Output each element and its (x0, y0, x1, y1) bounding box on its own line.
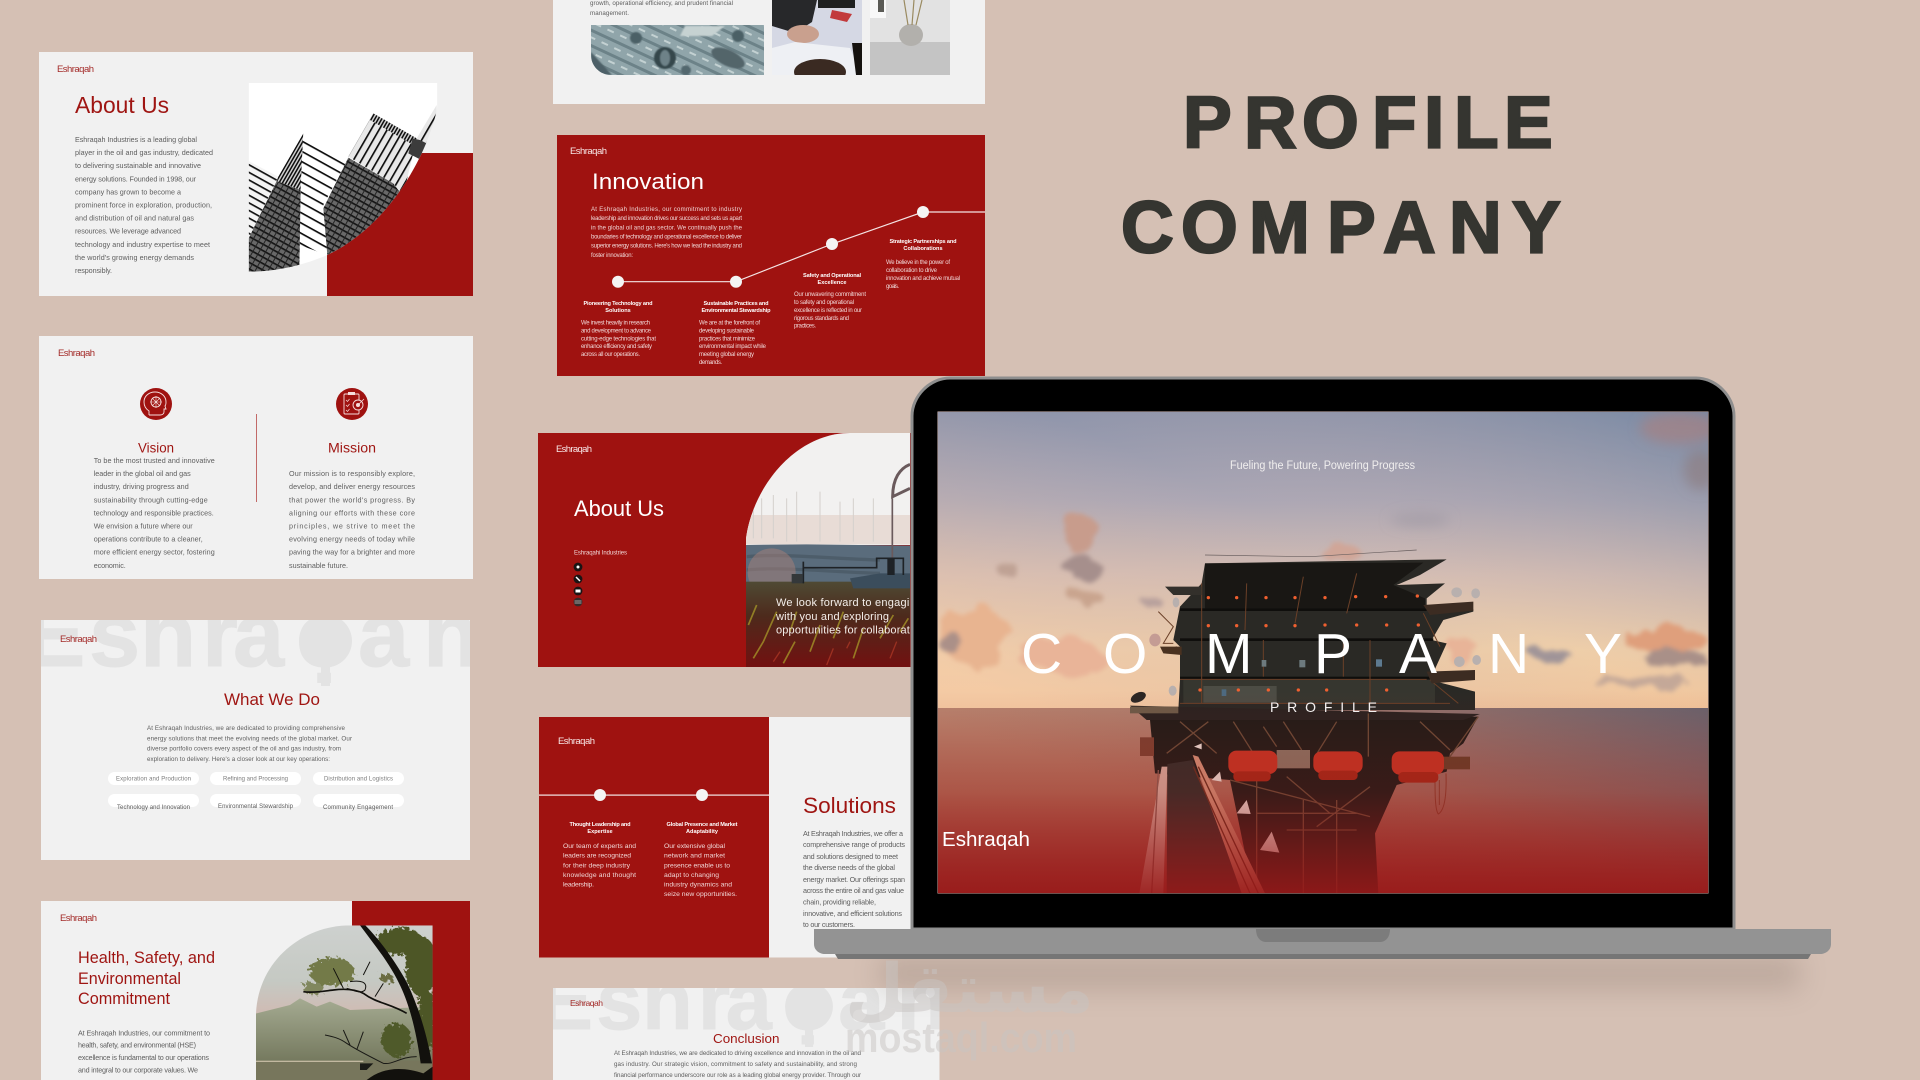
tagline: Fueling the Future, Powering Progress (1230, 460, 1415, 472)
watermark wordmark (41, 620, 470, 686)
milestone: Pioneering Technology: and development to advance (581, 328, 652, 334)
body text: technology and industry expertise to meet (75, 240, 210, 249)
Vision text: more efficient energy sector, fostering (94, 548, 215, 557)
watermark wordmark (553, 988, 940, 1047)
heading: Conclusion (713, 1032, 780, 1046)
body text: energy solutions. Founded in 1998, our (75, 174, 197, 184)
oil rig (1129, 550, 1481, 893)
cover title: COMPANY (1021, 622, 1622, 686)
laptop base (814, 929, 1831, 959)
milestone: Pioneering Technology: Pioneering Technology and (584, 301, 653, 307)
photo: plant by window (870, 0, 950, 75)
milestone: Strategic Partnerships: goals. (886, 284, 899, 290)
Mission text: paving the way for a brighter and more (289, 548, 415, 557)
timeline (539, 789, 769, 801)
body text: to our customers. (803, 920, 855, 929)
body text: prominent force in exploration, production, (75, 200, 212, 210)
body text (78, 1028, 210, 1074)
closing message: We look forward to engaging (776, 597, 922, 609)
item: Thought Leadership: leaders are recognized (563, 853, 631, 860)
body text: chain, providing reliable, (803, 898, 876, 906)
building photo (249, 83, 437, 273)
text: management. (590, 10, 629, 17)
item: Global Presence: network and market (664, 853, 725, 860)
red corner block (327, 153, 473, 296)
item: Global Presence: adapt to changing (664, 872, 719, 879)
intro text: in the global oil and gas sector. We continually push the (591, 226, 743, 232)
pills: key operations: Refining and Processing (223, 776, 288, 782)
red fade overlay (938, 723, 1708, 894)
Vision text: industry, driving progress and (94, 482, 189, 491)
Mission text: principles, we strive to meet the (289, 522, 415, 530)
item: Thought Leadership: knowledge and thought (563, 872, 636, 879)
intro text: leadership and innovation drives our success and sets us apart (591, 216, 742, 222)
panel: financial slide (top, cropped) (553, 0, 985, 104)
body text (803, 829, 905, 929)
closing message: with you and exploring (775, 611, 889, 623)
panel: Health, Safety and Environmental slide (41, 901, 470, 1080)
milestone: Pioneering Technology: enhance efficiency and safety (581, 344, 652, 350)
cover logo: Eshraqah (942, 829, 1030, 851)
intro text: exploration to delivery. Here's a closer look at our key operations: (147, 756, 330, 763)
body text: health, safety, and environmental (HSE) (78, 1040, 196, 1050)
main title: PROFILE COMPANY: COMPANY (1121, 188, 1561, 268)
main deck (1130, 706, 1480, 720)
Vision text: operations contribute to a cleaner, (94, 535, 203, 544)
pills: key operations: Environmental Stewardship (218, 804, 294, 810)
logo: Eshraqah (556, 444, 592, 455)
item: Global Presence: industry dynamics and (664, 882, 732, 888)
laptop shadow (880, 956, 1800, 990)
milestone: Sustainable Practices: Environmental Stewardship (702, 308, 771, 314)
closing message: opportunities for collaboration (776, 624, 925, 636)
heading: Environmental (78, 970, 181, 988)
heading: Health, Safety, and (78, 949, 215, 967)
red block (352, 901, 470, 1080)
body text: Eshraqah Industries is a leading global (75, 135, 197, 144)
heading: What We Do (224, 690, 320, 709)
intro text: At Eshraqah Industries, our commitment to industry (591, 207, 742, 213)
timeline (612, 206, 985, 288)
milestone: Safety and Operational: excellence is reflected in our (794, 308, 862, 314)
body text: to delivering sustainable and innovative (75, 161, 201, 170)
item: Thought Leadership: leadership. (563, 882, 594, 888)
milestone: Strategic Partnerships: innovation and achieve mutual (886, 276, 960, 282)
Mission text: aligning our efforts with these core (289, 508, 415, 517)
item: Global Presence: seize new opportunities. (664, 891, 737, 898)
photo: dollar bills (591, 25, 764, 75)
body text: comprehensive range of products (803, 840, 905, 849)
panel: What We Do slide (41, 620, 470, 860)
dishes (1169, 587, 1481, 696)
milestone: Sustainable Practices: developing sustainable (699, 328, 755, 334)
body text: the diverse needs of the global (803, 863, 895, 872)
watermark wordmark: Eshraọah (538, 954, 947, 1047)
Vision text: sustainability through cutting-edge (94, 495, 208, 504)
intro text (147, 725, 352, 763)
milestone: Pioneering Technology: cutting-edge technologies that (581, 336, 656, 342)
closing message (776, 598, 910, 636)
tree photo (250, 923, 438, 1080)
heading (78, 949, 215, 1008)
icon: clipboard and target (336, 388, 368, 420)
body text: innovative, and efficient solutions (803, 909, 902, 918)
Vision heading: Vision (138, 440, 174, 456)
milestone: Sustainable Practices: Sustainable Practices and (704, 301, 769, 307)
laptop mockup (814, 378, 1831, 959)
logo: Eshraqah (558, 736, 595, 747)
body text: across the entire oil and gas value (803, 886, 904, 895)
milestone: Strategic Partnerships: collaboration to drive (886, 268, 938, 274)
milestone: Safety and Operational: Our unwavering commitment (794, 292, 866, 298)
intro text (591, 207, 743, 259)
body text: At Eshraqah Industries, we offer a (803, 829, 903, 838)
logo: Eshraqah (58, 348, 95, 359)
pills: key operations: Community Engagement (323, 805, 393, 811)
text: growth, operational efficiency, and prudent financial (590, 0, 733, 7)
main title: PROFILE COMPANY (1121, 82, 1561, 268)
milestone: Sustainable Practices: meeting global energy (699, 352, 754, 358)
panel: Conclusion slide (cropped) (553, 988, 940, 1080)
watermark wordmark: Eshraọah (24, 584, 479, 686)
cover subtitle: PROFILE (1270, 699, 1377, 715)
body text: At Eshraqah Industries, our commitment to (78, 1028, 210, 1038)
body text: and distribution of oil and natural gas (75, 214, 194, 222)
rig lights (1198, 594, 1420, 692)
milestone: Safety and Operational: Excellence (818, 280, 846, 286)
sea (938, 708, 1708, 894)
clouds (939, 516, 1707, 688)
Mission text: develop, and deliver energy resources (289, 482, 415, 491)
body text: resources. We leverage advanced (75, 227, 181, 236)
panel: Vision and Mission slide (39, 336, 473, 579)
Vision text: technology and responsible practices. (94, 508, 214, 517)
logo: Eshraqah (570, 998, 603, 1008)
Vision text: economic. (94, 561, 126, 570)
Vision text: leader in the global oil and gas (94, 469, 191, 478)
panel: Innovation slide (557, 135, 985, 376)
lifeboats (1228, 751, 1444, 775)
heading: Commitment (78, 990, 170, 1008)
Vision text: We envision a future where our (94, 522, 193, 530)
pills: key operations: Distribution and Logistics (324, 776, 393, 782)
intro text: At Eshraqah Industries, we are dedicated to providing comprehensive (147, 725, 346, 732)
milestone: Pioneering Technology: Solutions (605, 308, 631, 314)
intro text: energy solutions that meet the evolving needs of the global market. Our (147, 736, 352, 742)
item: Global Presence: Adaptability (686, 829, 719, 835)
milestone: Pioneering Technology (581, 301, 656, 358)
milestone: Pioneering Technology: We invest heavily in research (581, 321, 650, 327)
heading: About Us (574, 496, 664, 521)
heading: Innovation (592, 169, 704, 194)
company line: Eshraqahi Industries (574, 550, 627, 556)
panel: About Us contact slide (538, 432, 925, 668)
body text: responsibly. (75, 266, 112, 275)
body text: and solutions designed to meet (803, 852, 898, 861)
body text (75, 135, 213, 275)
item: Thought Leadership (563, 822, 636, 888)
intro text: boundaries of technology and operational excellence to deliver (591, 234, 742, 240)
heading: Solutions (803, 793, 896, 818)
intro text: foster innovation: (591, 253, 633, 259)
item: Thought Leadership: for their deep industry (563, 862, 631, 869)
item: Thought Leadership: Thought Leadership and (570, 822, 631, 828)
photo: person at laptop (772, 0, 862, 75)
milestone: Sustainable Practices: demands. (699, 360, 722, 366)
body text: gas industry. Our strategic vision, commitment to safety and sustainability, and strong (614, 1061, 858, 1068)
Vision text: To be the most trusted and innovative (94, 456, 215, 465)
oil pump photo (740, 432, 913, 668)
body text: At Eshraqah Industries, we are dedicated to driving excellence and innovation in the oil and (614, 1050, 862, 1057)
watermark: Mostaql: mostaql.com (845, 1014, 1077, 1061)
contact icons (574, 563, 582, 606)
Mission text: Our mission is to responsibly explore, (289, 469, 415, 478)
milestone: Sustainable Practices: environmental impact while (699, 344, 767, 350)
pills: key operations: Technology and Innovation (117, 805, 190, 811)
body text: excellence is fundamental to our operations (78, 1053, 209, 1062)
item: Thought Leadership: Expertise (587, 829, 613, 835)
watermark: Mostaql: مستقل (845, 950, 1094, 1029)
main title: PROFILE COMPANY: PROFILE (1183, 82, 1553, 164)
intro text: superior energy solutions. Here's how we lead the industry and (591, 244, 742, 250)
logo: Eshraqah (60, 913, 97, 924)
milestone: Pioneering Technology: across all our operations. (581, 352, 640, 358)
milestone: Sustainable Practices (699, 301, 771, 366)
body text: player in the oil and gas industry, dedicated (75, 148, 213, 157)
panel: Solutions slide (539, 717, 915, 958)
intro text: diverse portfolio covers every aspect of the oil and gas industry, from (147, 746, 341, 752)
body text: energy market. Our offerings span (803, 875, 905, 884)
body text: financial performance underscore our role as a leading global energy provider. Through our (614, 1072, 861, 1079)
milestone: Strategic Partnerships: Collaborations (903, 246, 943, 252)
screen: cover slide (938, 412, 1720, 894)
item: Global Presence (664, 822, 738, 898)
pills: key operations: Exploration and Production (116, 776, 191, 782)
milestone: Strategic Partnerships (886, 239, 960, 290)
milestone: Safety and Operational (794, 273, 866, 330)
body text: company has grown to become a (75, 188, 181, 196)
milestone: Sustainable Practices: We are at the forefront of (699, 321, 760, 327)
Mission text: sustainable future. (289, 561, 348, 570)
logo: Eshraqah (60, 634, 97, 645)
trusses (1167, 713, 1478, 893)
logo: Eshraqah (570, 146, 607, 157)
milestone: Safety and Operational: to safety and operational (794, 300, 854, 306)
Mission text: evolving energy needs of today while (289, 535, 415, 544)
laptop lid (912, 378, 1734, 929)
body text (614, 1050, 862, 1079)
item: Global Presence: Our extensive global (664, 843, 725, 850)
panel: About Us slide (39, 52, 473, 296)
body text: and integral to our corporate values. We (78, 1066, 198, 1074)
milestone: Strategic Partnerships: We believe in the power of (886, 260, 950, 266)
body text: the world's growing energy demands (75, 253, 194, 262)
logo: Eshraqah (57, 64, 94, 75)
pills: key operations (108, 772, 404, 811)
item: Thought Leadership: Our team of experts and (563, 843, 636, 850)
gangway (1167, 760, 1243, 893)
heading: About Us (75, 92, 169, 118)
Vision text (94, 456, 215, 570)
milestone: Safety and Operational: Safety and Operational (803, 273, 861, 279)
item: Global Presence: Global Presence and Market (666, 822, 738, 828)
milestone: Safety and Operational: practices. (794, 324, 816, 330)
Mission text: that power the world's progress. By (289, 495, 415, 504)
milestone: Safety and Operational: rigorous standards and (794, 316, 849, 322)
icon: head with brain (140, 388, 172, 420)
item: Global Presence: presence enable us to (664, 862, 730, 869)
milestone: Strategic Partnerships: Strategic Partnerships and (890, 239, 957, 245)
milestone: Sustainable Practices: practices that minimize (699, 336, 756, 342)
Mission text (289, 469, 415, 570)
text (590, 0, 733, 17)
Mission heading: Mission (328, 440, 376, 456)
